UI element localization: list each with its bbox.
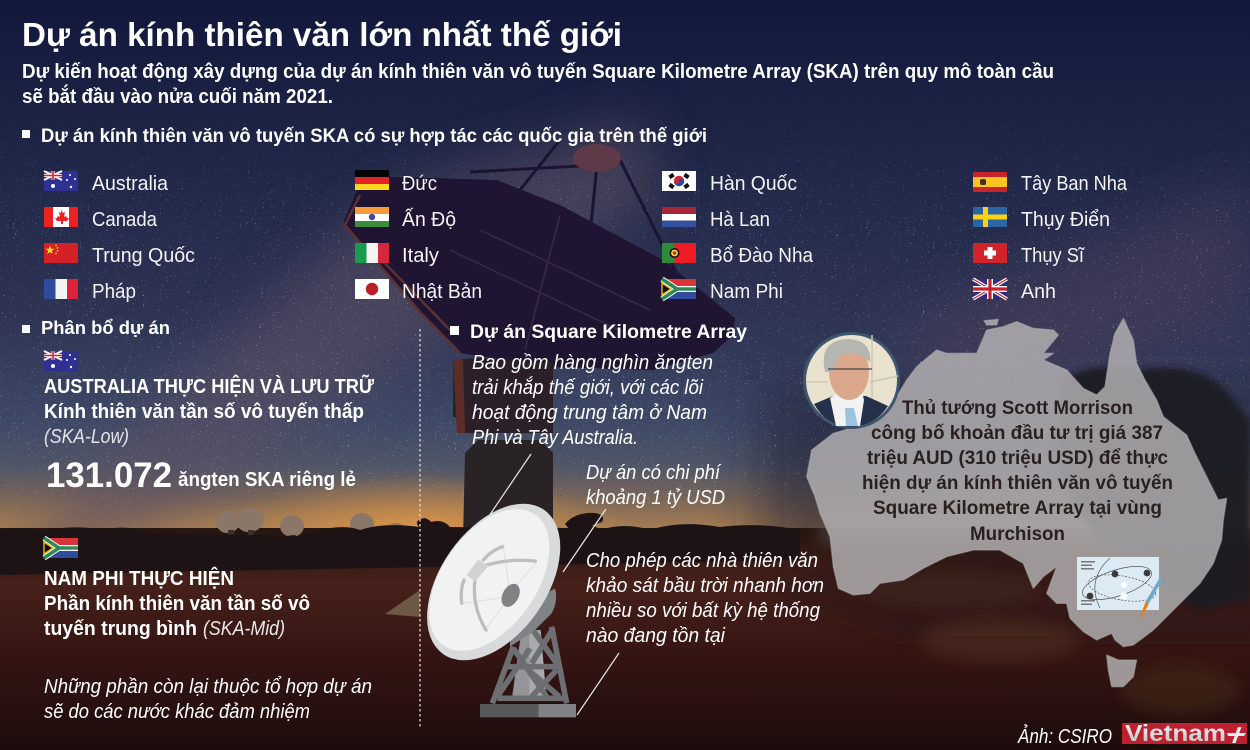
- struts: [463, 547, 537, 630]
- text: thousands of antennas: [472, 352, 713, 449]
- flag: South Korea: [662, 171, 696, 191]
- flag: South Africa: [662, 279, 696, 299]
- text: survey speed: [586, 550, 824, 647]
- label: Switzerland: Thụy Sĩ: [1021, 245, 1085, 267]
- text: cost: [586, 462, 725, 509]
- text: Morrison announcement: hiện dự án kính thiên văn vô tuyến: [862, 473, 1173, 494]
- label: Netherlands: Hà Lan: [710, 209, 770, 231]
- text: Australia role: Kính thiên văn tần số vô tuyến thấp: [44, 401, 364, 423]
- label: China: Trung Quốc: [92, 245, 195, 267]
- text: South Africa role: [44, 566, 310, 640]
- flag: Germany: [355, 170, 389, 190]
- text: thousands of antennas: hoạt động trung tâm ở Nam: [472, 402, 707, 424]
- text: Australia role: [44, 374, 374, 448]
- label: Sweden: Thụy Điển: [1021, 209, 1110, 231]
- text: survey speed: nhiều so với bất kỳ hệ thống: [586, 600, 820, 622]
- icon: site plan with pencil: [1077, 557, 1163, 618]
- icon: radio telescope dish: [400, 480, 588, 717]
- flag: Switzerland: [973, 243, 1007, 263]
- panel: Square Kilometre Array: [400, 321, 824, 717]
- flag: Australia small: [44, 351, 78, 371]
- background: hazy horizon on the right: [820, 518, 1250, 544]
- text: survey speed: nào đang tồn tại: [586, 625, 726, 647]
- flag: Australia: [44, 171, 78, 191]
- label: Japan: Nhật Bản: [402, 281, 482, 303]
- dish: [400, 480, 588, 684]
- label: South Korea: Hàn Quốc: [710, 173, 797, 195]
- label: Australia: Australia: [92, 173, 169, 195]
- background: large radio dish silhouette: [343, 140, 735, 540]
- flag: France: [44, 279, 78, 299]
- map: Australia silhouette: [807, 318, 1227, 687]
- text: South Africa role: Phần kính thiên văn tần số vô: [44, 593, 310, 615]
- background: horizon trees and distant dishes: [0, 505, 1250, 640]
- text: other countries note: sẽ do các nước khác đảm nhiệm: [44, 701, 310, 723]
- panel: project allocation: [22, 317, 374, 723]
- text: South Africa role: NAM PHI THỰC HIỆN: [44, 566, 234, 590]
- text: survey speed: Cho phép các nhà thiên văn: [586, 550, 818, 572]
- flag: Netherlands: [662, 207, 696, 227]
- panel: country list: [44, 170, 1128, 303]
- flag: South Africa small: [44, 538, 78, 558]
- background: right side tree: [1058, 367, 1250, 610]
- text: other countries note: Những phần còn lại thuộc tổ hợp dự án: [44, 676, 372, 698]
- flag: Canada: [44, 207, 78, 227]
- title: Dự án kính thiên văn lớn nhất thế giới: [22, 16, 622, 53]
- text: cost: khoảng 1 tỷ USD: [586, 487, 725, 509]
- flag: Japan: [355, 279, 389, 299]
- text: other countries note: [44, 676, 372, 723]
- logo: Vietnam+: Vietnam: [1125, 720, 1226, 746]
- stat: 131.072 antennas: ăngten SKA riêng lẻ: [178, 469, 356, 491]
- label: France: Pháp: [92, 281, 136, 303]
- flag: China: [44, 243, 78, 263]
- text: survey speed: khảo sát bầu trời nhanh hơn: [586, 575, 824, 597]
- text: Australia role: (SKA-Low): [44, 426, 129, 448]
- text: Morrison announcement: Thủ tướng Scott Morrison: [902, 398, 1133, 419]
- background: ground: [0, 528, 1250, 750]
- text: cost: Dự án có chi phí: [586, 462, 722, 484]
- flag: Italy: [355, 243, 389, 263]
- heading: SKA: Dự án Square Kilometre Array: [470, 321, 747, 343]
- text: thousands of antennas: trải khắp thế giới, với các lõi: [472, 376, 704, 399]
- stat: 131.072 antennas: 131.072: [46, 456, 172, 495]
- label: Spain: Tây Ban Nha: [1021, 173, 1128, 195]
- flag: Sweden: [973, 207, 1007, 227]
- text: South Africa role: tuyến trung bình: [44, 618, 197, 640]
- text: Morrison announcement: Murchison: [970, 524, 1065, 545]
- tower: [492, 627, 567, 703]
- text: thousands of antennas: Phi và Tây Australia.: [472, 427, 638, 449]
- text: Morrison announcement: công bố khoản đầu tư trị giá 387: [871, 423, 1163, 444]
- credit: photo source: Ảnh: CSIRO: [1017, 724, 1112, 748]
- text: thousands of antennas: Bao gồm hàng nghìn ăngten: [472, 352, 713, 374]
- flag: India: [355, 207, 389, 227]
- text: Morrison announcement: [862, 398, 1173, 545]
- flag: Portugal: [662, 243, 696, 263]
- text: South Africa role: (SKA-Mid): [203, 618, 285, 640]
- callout lines: [489, 454, 619, 715]
- label: United Kingdom: Anh: [1021, 281, 1056, 303]
- subtitle: Dự kiến hoạt động xây dựng của dự án kính thiên văn vô tuyến Square Kilometre Array (SKA) trên quy mô toàn cầu: [22, 61, 1054, 83]
- label: Portugal: Bổ Đào Nha: [710, 245, 814, 267]
- label: Italy: Italy: [402, 245, 439, 267]
- heading: allocation: Phân bổ dự án: [41, 317, 170, 338]
- heading: participating countries: Dự án kính thiên văn vô tuyến SKA có sự hợp tác các quốc gia trên thế giới: [41, 125, 707, 147]
- flag: United Kingdom: [973, 279, 1007, 299]
- label: South Africa: Nam Phi: [710, 281, 783, 303]
- text: Morrison announcement: triệu AUD (310 triệu USD) để thực: [867, 448, 1168, 469]
- stat: 131.072 antennas: [46, 456, 356, 495]
- label: Canada: Canada: [92, 209, 158, 231]
- text: Australia role: AUSTRALIA THỰC HIỆN VÀ LƯU TRỮ: [44, 374, 374, 398]
- flag: Spain: [973, 172, 1007, 192]
- text: Morrison announcement: Square Kilometre Array tại vùng: [873, 498, 1162, 519]
- portrait: Scott Morrison: [804, 334, 898, 428]
- label: India: Ấn Độ: [402, 208, 456, 231]
- subtitle: [22, 61, 1054, 108]
- label: Germany: Đức: [402, 173, 437, 195]
- subtitle: sẽ bắt đầu vào nửa cuối năm 2021.: [22, 84, 333, 108]
